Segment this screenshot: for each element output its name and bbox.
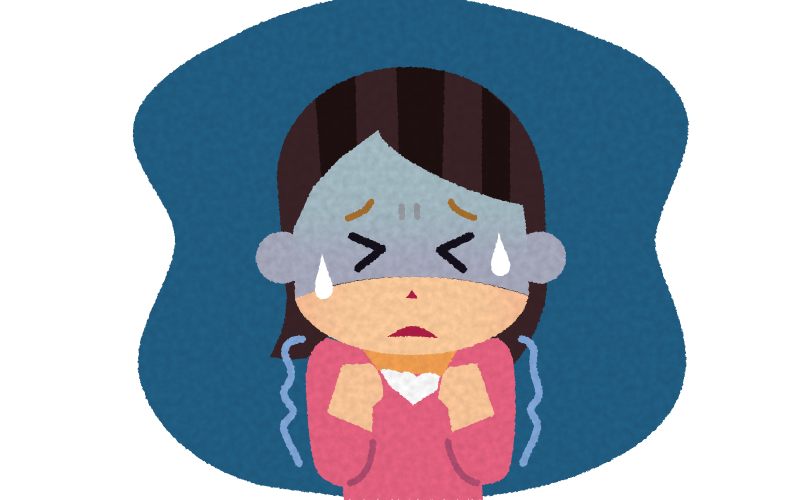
right eye xyxy=(440,236,470,269)
hair stripes xyxy=(315,66,510,202)
nose xyxy=(406,290,418,298)
left tear xyxy=(315,253,333,299)
right ear xyxy=(514,232,566,284)
tears xyxy=(315,232,510,299)
illustration: shivering woman on dark blue blob xyxy=(132,0,690,500)
right tear xyxy=(491,232,510,276)
right sleeve crease xyxy=(448,442,477,483)
mouth xyxy=(387,326,438,338)
left sleeve crease xyxy=(350,442,373,483)
left fist xyxy=(327,363,383,432)
background blob xyxy=(133,0,688,497)
collar: white heart xyxy=(380,369,440,405)
right fist xyxy=(438,363,495,432)
worry lines xyxy=(402,206,417,217)
face upper mask xyxy=(293,130,529,299)
hair xyxy=(270,60,547,365)
left eye xyxy=(352,236,382,268)
neck xyxy=(363,350,457,376)
left shiver line xyxy=(284,339,302,463)
face lower xyxy=(295,277,528,355)
left eyebrow xyxy=(348,202,371,218)
right eyebrow xyxy=(451,202,474,218)
sweater xyxy=(306,338,515,500)
left ear xyxy=(256,232,308,284)
right shiver line xyxy=(522,339,539,463)
